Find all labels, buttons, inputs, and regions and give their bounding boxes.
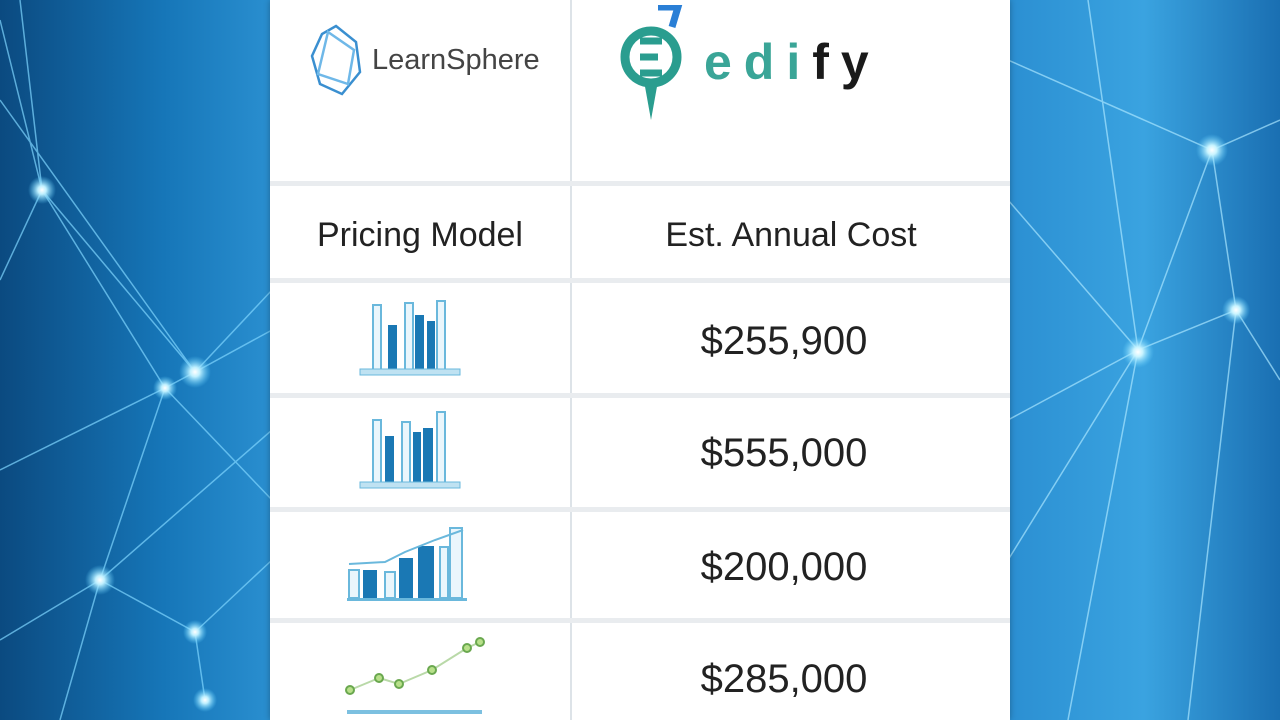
value: row 3: $200,000 [701,545,867,589]
value: row 2: $555,000 [701,431,867,475]
icon: line chart [345,637,485,714]
heading: Est. Annual Cost: Est. Annual Cost [665,216,917,254]
icon: bar chart 2 [360,411,460,488]
icon: sphere [310,24,362,96]
value: row 4: $285,000 [701,657,867,701]
background left [0,0,270,720]
logo: LearnSphere [310,24,540,96]
icon: bar chart 1 [360,300,460,376]
logo: edify: edify [704,34,881,90]
value: row 1: $255,900 [701,319,867,363]
icon: growth bar chart [347,527,467,601]
background right [1010,0,1280,720]
comparison table panel [270,0,1010,720]
heading: Pricing Model: Pricing Model [317,216,523,254]
logo: edify [620,5,881,120]
icon: E pin [620,5,682,120]
logo: LearnSphere: LearnSphere [372,44,540,76]
